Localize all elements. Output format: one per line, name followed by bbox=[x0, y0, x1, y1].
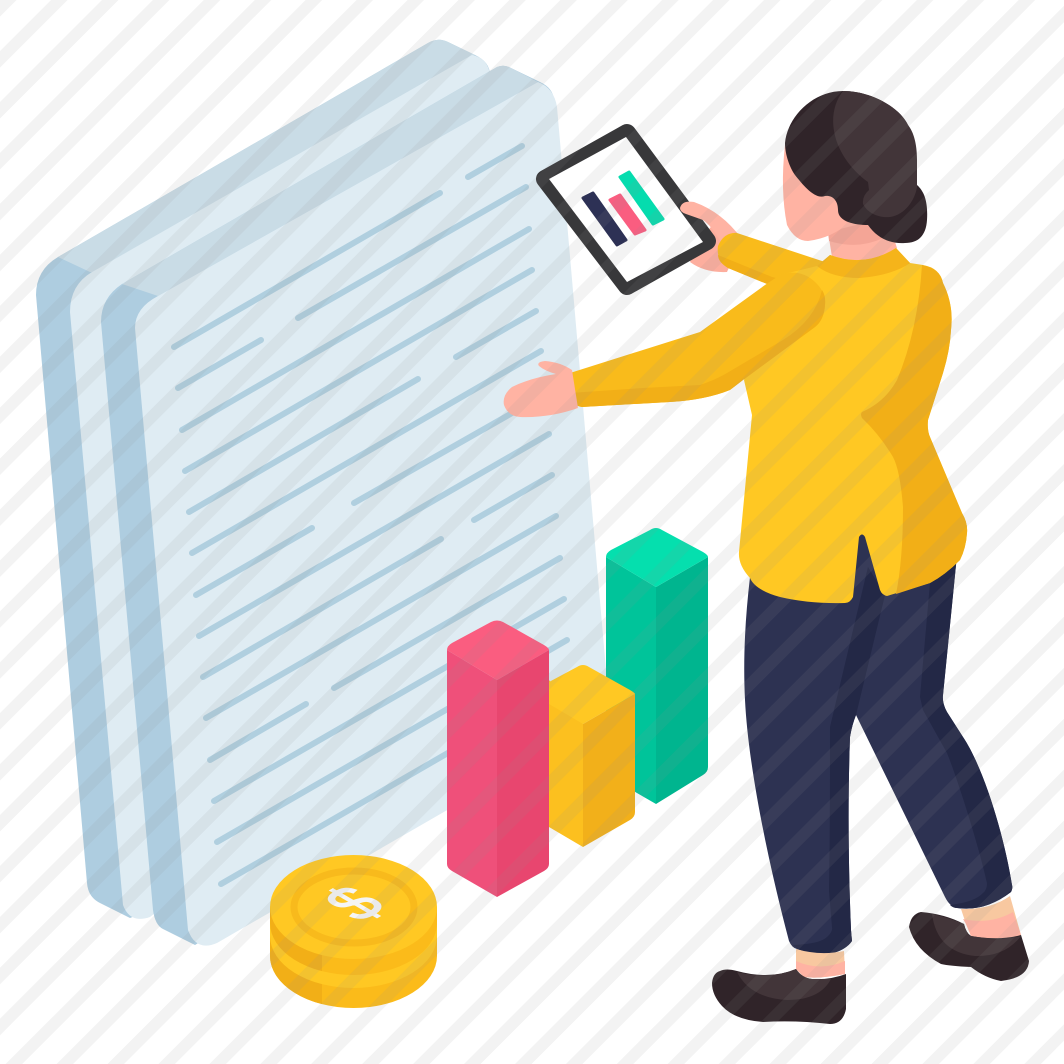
person bbox=[504, 91, 1029, 1024]
front hand bbox=[504, 361, 578, 417]
tablet chart bars bbox=[583, 172, 663, 245]
sleeve shadow bbox=[570, 290, 825, 407]
back hand palm bbox=[690, 222, 742, 272]
yellow bar bbox=[549, 665, 635, 847]
collar bbox=[817, 248, 910, 278]
pants shadow bbox=[793, 555, 1012, 954]
back document block bbox=[36, 40, 500, 919]
sock right bbox=[961, 896, 1021, 938]
rear sleeve bbox=[718, 233, 832, 292]
hair highlight bbox=[833, 91, 917, 217]
tablet bbox=[545, 133, 707, 286]
text lines on document bbox=[174, 146, 567, 884]
green bar bbox=[606, 528, 708, 804]
neck bbox=[828, 215, 897, 261]
coin stack bbox=[270, 855, 437, 1008]
sweater side shadow bbox=[861, 265, 967, 594]
front arm bbox=[569, 273, 825, 407]
dollar sign: $ bbox=[308, 877, 401, 930]
pants bbox=[744, 530, 1012, 954]
shoe left bbox=[712, 969, 846, 1024]
sock left bbox=[796, 949, 845, 978]
thumb on tablet bbox=[680, 202, 741, 244]
shoe right bbox=[909, 912, 1029, 981]
face bbox=[783, 145, 850, 241]
front document block bbox=[101, 66, 610, 946]
hair bbox=[785, 91, 927, 243]
sweater body bbox=[739, 248, 967, 603]
pink bar bbox=[447, 620, 549, 897]
document stack bbox=[36, 40, 610, 946]
